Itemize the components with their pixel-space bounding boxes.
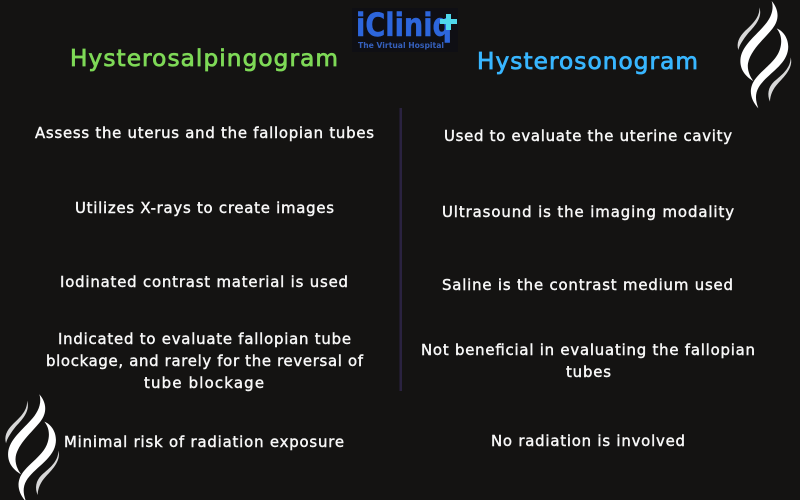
heading: Hysterosalpingogram: Hysterosalpingogram: [70, 45, 338, 72]
text: left row 4: tube blockage: [144, 374, 264, 392]
text: left row 5: Minimal risk of radiation exposure: [64, 433, 344, 451]
logo: iCliniq: The Virtual Hospital: [358, 41, 444, 50]
text: left row 4: blockage, and rarely for the reversal of: [46, 352, 364, 370]
text: left row 4: Indicated to evaluate fallopian tube: [58, 330, 351, 348]
text: right row 5: No radiation is involved: [491, 432, 685, 450]
logo: iCliniq: iCliniq: [356, 6, 452, 44]
text: right row 4: tubes: [566, 363, 611, 381]
text: right row 4: [421, 341, 755, 381]
text: right row 1: Used to evaluate the uterine cavity: [444, 127, 732, 145]
icon: bottom left swirl: [5, 394, 59, 500]
icon: top right swirl: [738, 1, 791, 108]
text: left row 2: Utilizes X-rays to create images: [75, 199, 334, 217]
centre divider: [400, 108, 402, 391]
text: right row 2: Ultrasound is the imaging modality: [442, 203, 734, 221]
heading: Hysterosonogram: Hysterosonogram: [477, 48, 698, 75]
text: right row 3: Saline is the contrast medium used: [442, 276, 733, 294]
text: left row 3: Iodinated contrast material is used: [60, 273, 348, 291]
text: left row 1: Assess the uterus and the fallopian tubes: [35, 124, 374, 142]
text: right row 4: Not beneficial in evaluating the fallopian: [421, 341, 755, 359]
text: left row 4: [46, 330, 364, 392]
